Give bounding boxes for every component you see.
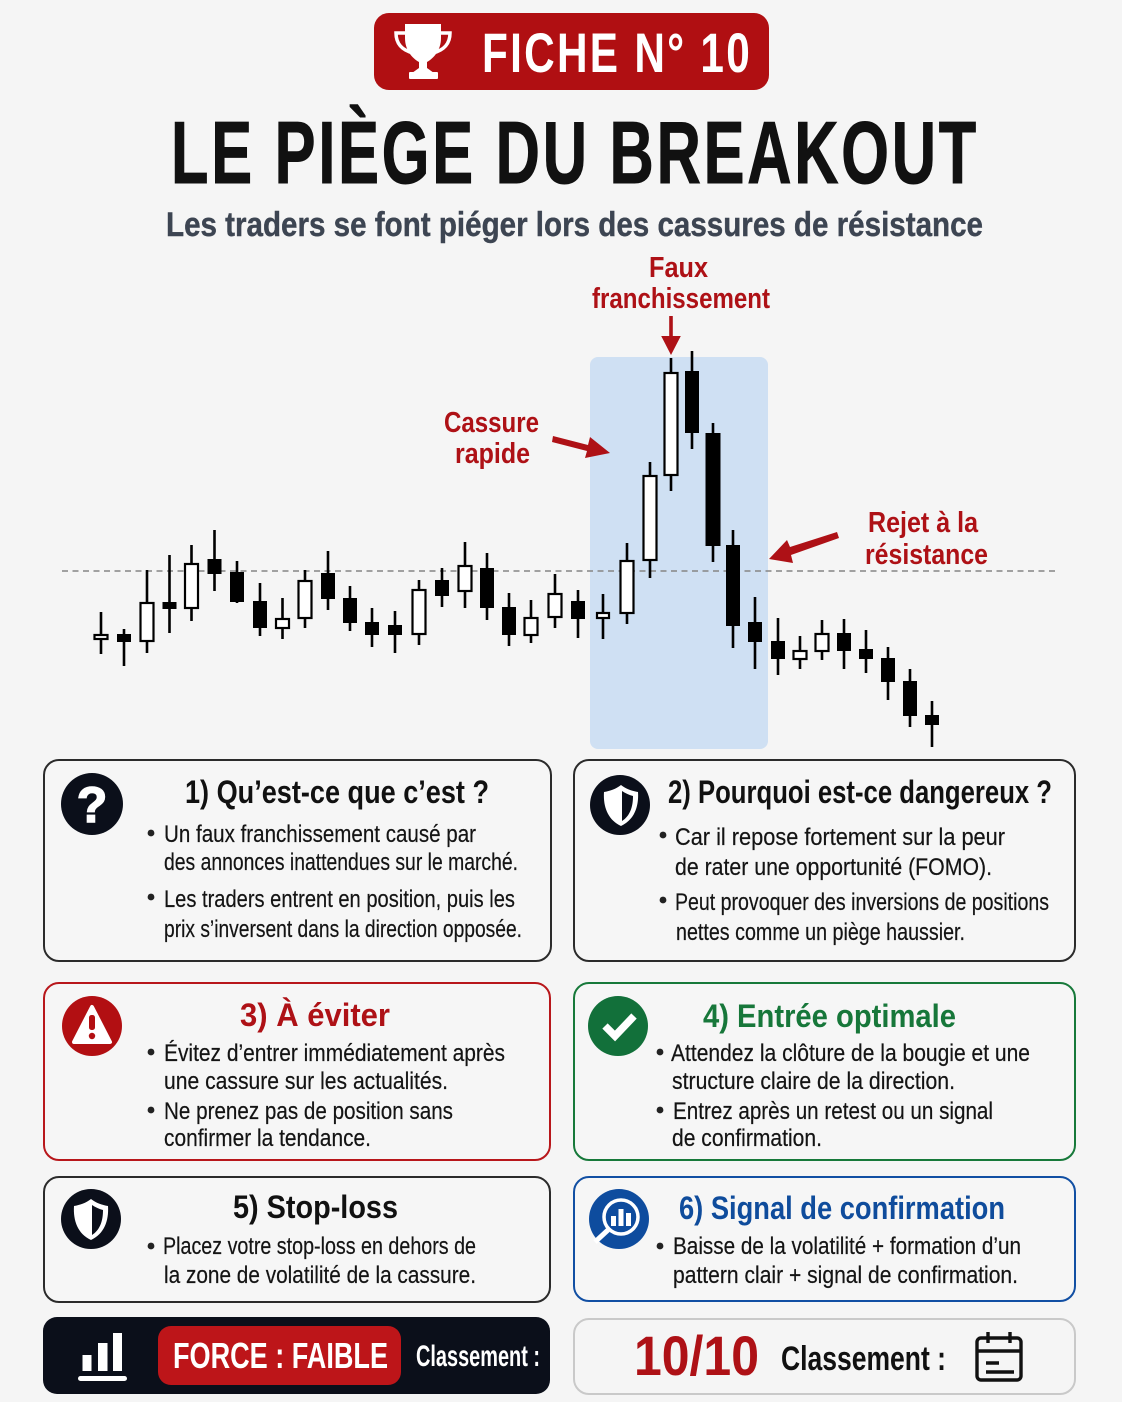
icon: bar chart (78, 1333, 127, 1381)
bar: force rating: Classement : (416, 1340, 540, 1373)
panel: qu'est-ce que c'est: Les traders entrent en position, puis les (164, 886, 515, 913)
icon: shield (61, 1189, 121, 1249)
panel: qu'est-ce que c'est (44, 760, 551, 961)
panel: entree optimale (574, 983, 1075, 1160)
panel: qu'est-ce que c'est: 1) Qu’est-ce que c’est ? (185, 774, 489, 810)
panel: stop-loss: Placez votre stop-loss en dehors de (163, 1233, 476, 1260)
resistance line (62, 570, 1056, 572)
panel: a eviter: Évitez d’entrer immédiatement après (164, 1040, 505, 1067)
icon: trophy: FICHE N° 10 (482, 21, 752, 84)
annotation: faux franchissement: Faux (649, 252, 708, 284)
panel: signal de confirmation: Baisse de la volatilité + formation d’un (673, 1233, 1021, 1260)
icon: magnifier with bars (589, 1189, 649, 1249)
badge: fiche number (374, 13, 769, 90)
panel: a eviter: une cassure sur les actualités. (164, 1068, 448, 1095)
icon: question mark: ? (77, 777, 107, 833)
candlestick chart (94, 351, 939, 747)
panel: a eviter: confirmer la tendance. (164, 1125, 371, 1152)
panel: signal de confirmation: pattern clair + signal de confirmation. (673, 1262, 1018, 1289)
pill: force faible: FORCE : FAIBLE (173, 1335, 388, 1376)
panel: stop-loss (44, 1177, 550, 1302)
subtitle: Les traders se font piéger lors des cassures de résistance (166, 206, 983, 244)
panel: pourquoi est-ce dangereux: Car il repose fortement sur la peur (675, 824, 1005, 851)
panel: pourquoi est-ce dangereux (574, 760, 1075, 961)
panel: a eviter: 3) À éviter (240, 997, 390, 1033)
annotation: cassure rapide: Cassure (444, 407, 539, 439)
panel: stop-loss: 5) Stop-loss (233, 1189, 398, 1225)
annotation: rejet a la resistance: résistance (865, 539, 988, 571)
icon: trophy (396, 21, 752, 84)
icon: shield (590, 775, 650, 835)
icon: warning (62, 996, 122, 1056)
annotation: rejet a la resistance: Rejet à la (868, 507, 979, 539)
panel: a eviter: Ne prenez pas de position sans (164, 1098, 453, 1125)
panel: pourquoi est-ce dangereux: Peut provoquer des inversions de positions (675, 889, 1049, 916)
bar: force rating (43, 1317, 550, 1394)
panel: a eviter (44, 983, 550, 1160)
panel: entree optimale: Entrez après un retest ou un signal (673, 1098, 993, 1125)
annotation: faux franchissement: franchissement (592, 283, 770, 315)
panel: entree optimale: Attendez la clôture de la bougie et une (671, 1040, 1030, 1067)
panel: entree optimale: 4) Entrée optimale (703, 998, 956, 1034)
panel: score: 10/10 (634, 1324, 759, 1387)
icon: question mark (61, 773, 123, 835)
highlighted breakout zone (590, 357, 768, 749)
annotation: rejet a la resistance (769, 507, 988, 571)
pill: force faible (158, 1326, 401, 1385)
panel: score: Classement : (781, 1340, 946, 1378)
panel: signal de confirmation (574, 1177, 1075, 1301)
panel: pourquoi est-ce dangereux: de rater une opportunité (FOMO). (675, 854, 992, 881)
panel: entree optimale: de confirmation. (672, 1125, 822, 1152)
annotation: cassure rapide: rapide (455, 438, 530, 470)
panel: qu'est-ce que c'est: Un faux franchissement causé par (164, 821, 476, 848)
panel: qu'est-ce que c'est: des annonces inattendues sur le marché. (164, 849, 518, 876)
panel: pourquoi est-ce dangereux: nettes comme un piège haussier. (676, 919, 965, 946)
panel: entree optimale: structure claire de la direction. (672, 1068, 955, 1095)
icon: calendar (977, 1332, 1021, 1380)
panel: stop-loss: la zone de volatilité de la cassure. (164, 1262, 476, 1289)
annotation: faux franchissement (592, 252, 770, 355)
panel: score (574, 1319, 1075, 1394)
annotation: cassure rapide (444, 407, 610, 470)
panel: qu'est-ce que c'est: prix s’inversent dans la direction opposée. (164, 916, 522, 943)
panel: signal de confirmation: 6) Signal de confirmation (679, 1190, 1005, 1226)
icon: check mark (588, 996, 648, 1056)
